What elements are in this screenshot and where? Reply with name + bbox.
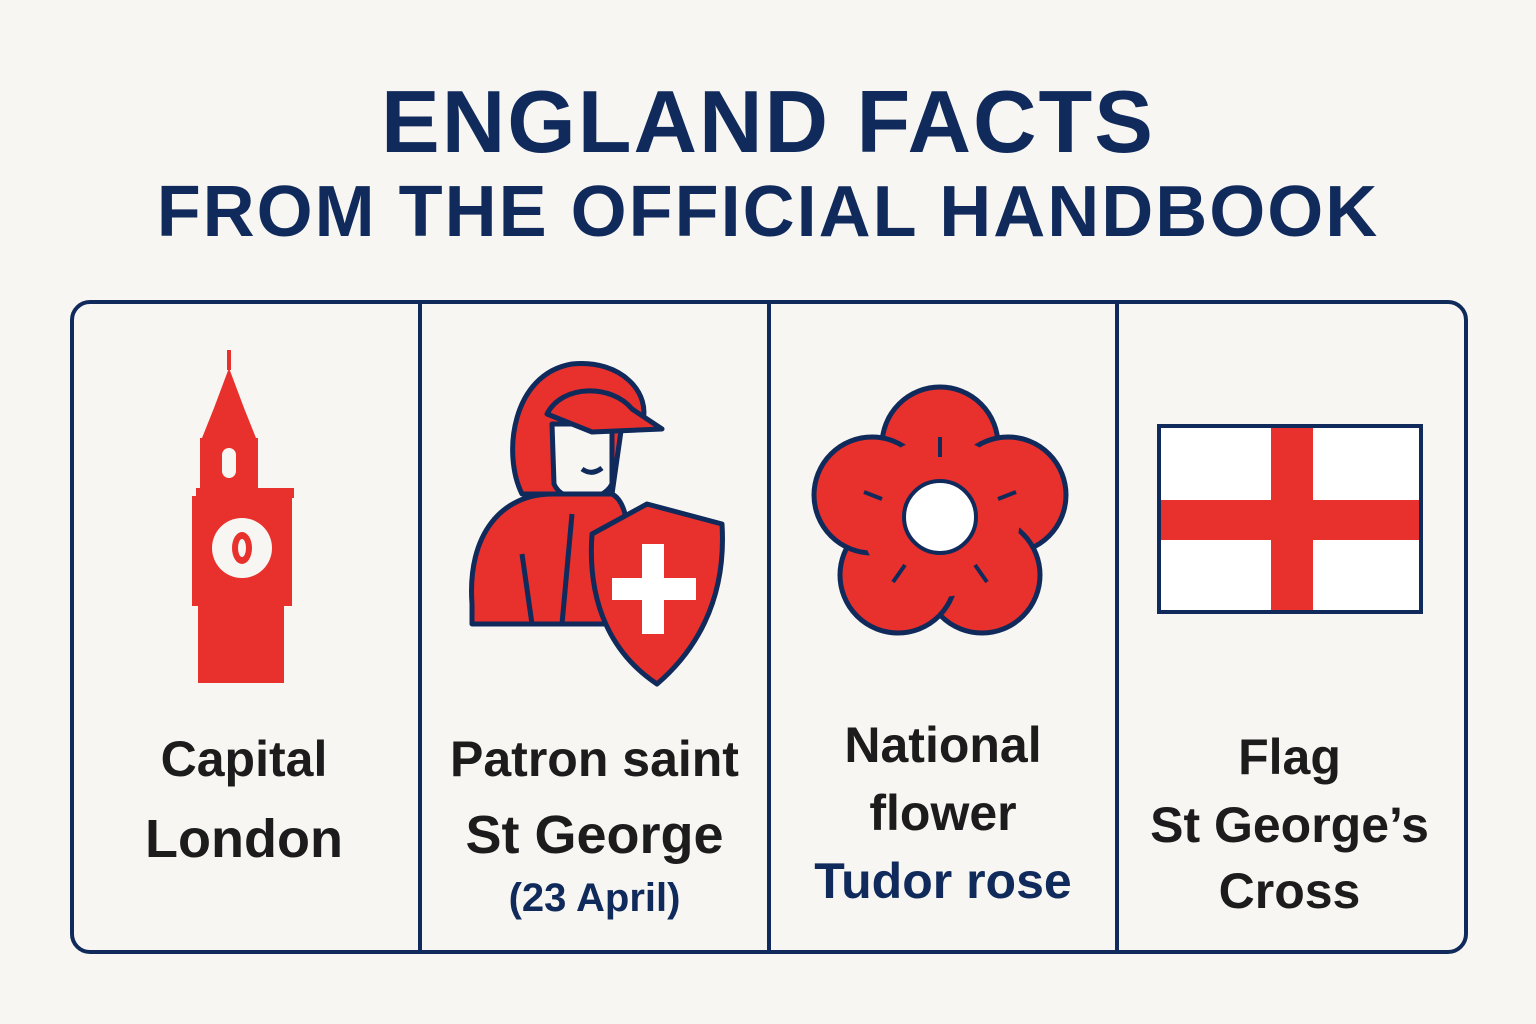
panel frame [70,300,1468,954]
text: patron saint st george: Patron saint [450,731,739,787]
panel: patron saint [450,361,739,920]
icon: knight with shield [469,361,725,687]
text: capital london: London [145,809,343,869]
text: patron saint st george [450,731,739,920]
subtitle: FROM THE OFFICIAL HANDBOOK [157,172,1379,252]
icon: st george's cross flag [1157,424,1423,614]
title: ENGLAND FACTS [381,72,1155,171]
text: national flower tudor rose: Tudor rose [814,853,1072,909]
text: national flower tudor rose [814,717,1072,909]
text: national flower tudor rose: National [844,717,1042,773]
text: national flower tudor rose: flower [869,785,1017,841]
text: capital london [145,731,343,869]
text: patron saint st george: St George [465,805,724,865]
text: flag st george's cross: Cross [1219,863,1360,919]
panel: capital [145,350,343,869]
text: flag st george's cross: St George’s [1150,797,1429,853]
icon: tudor rose [812,384,1068,636]
text: capital london: Capital [161,731,327,787]
panel: national flower [812,384,1072,909]
icon: big ben [192,350,294,683]
panel: flag [1150,424,1429,919]
text: flag st george's cross [1150,729,1429,919]
text: flag st george's cross: Flag [1238,729,1341,785]
text: patron saint st george: (23 April) [509,876,680,920]
